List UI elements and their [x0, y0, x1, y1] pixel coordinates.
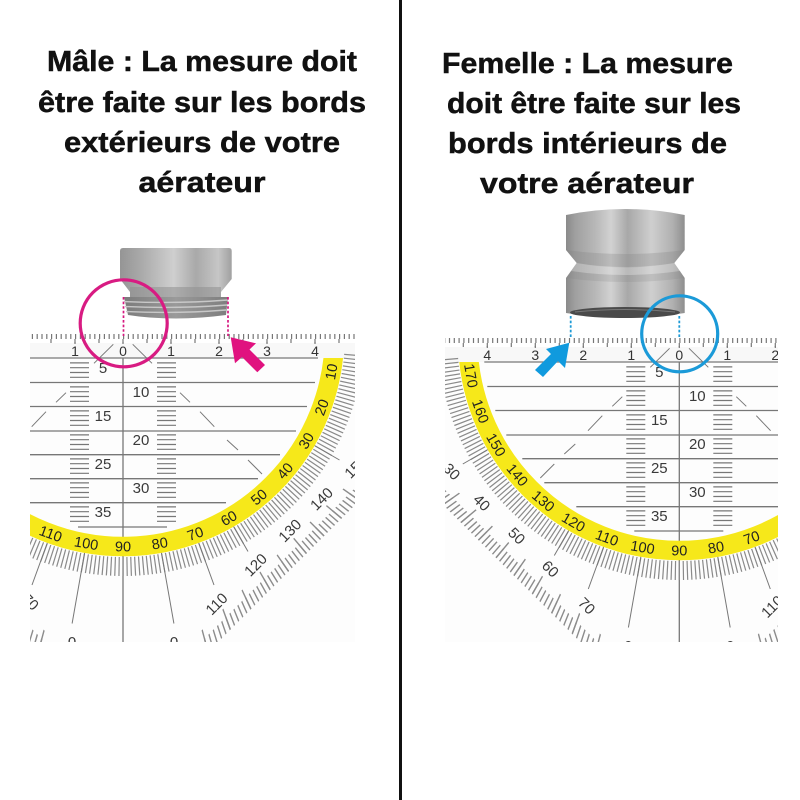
- protractor ruler: female: 2: [579, 347, 587, 363]
- measure guides: male: [124, 297, 228, 336]
- protractor ruler: male: 120: [241, 550, 271, 580]
- protractor ruler: female: 0: [675, 347, 683, 363]
- protractor ruler: female: 15: [651, 412, 668, 429]
- heading: male: aérateur: [138, 167, 266, 199]
- yellow degree scale: female: 170: [460, 363, 480, 389]
- yellow degree scale: male: 20: [312, 397, 333, 418]
- divider line: [399, 0, 402, 800]
- heading: male: [38, 46, 366, 199]
- protractor ruler: female: 5: [655, 364, 663, 381]
- yellow degree scale: female: 150: [482, 431, 508, 460]
- protractor ruler: female: [445, 338, 778, 642]
- protractor ruler: female: 0: [624, 638, 632, 655]
- yellow degree scale: female: 130: [528, 488, 557, 516]
- protractor ruler: female: 20: [689, 436, 706, 453]
- protractor ruler: male: 5: [99, 360, 107, 377]
- measure guides: female: [571, 316, 679, 339]
- protractor ruler: male: 35: [95, 504, 111, 521]
- protractor ruler: female: 50: [504, 524, 528, 548]
- protractor ruler: female: 40: [469, 491, 493, 515]
- yellow degree scale: female: 80: [707, 539, 726, 558]
- protractor ruler: male: 3: [263, 343, 271, 359]
- aerator: male thread: [120, 248, 232, 318]
- protractor ruler: male: 1: [71, 343, 79, 359]
- protractor ruler: male: 1: [167, 343, 175, 359]
- yellow degree scale: male: 80: [151, 535, 169, 554]
- yellow degree scale: female: 110: [593, 527, 620, 550]
- protractor ruler: male: 2: [215, 343, 223, 359]
- protractor ruler: male: 140: [307, 484, 337, 514]
- yellow degree scale: male: 100: [73, 534, 99, 554]
- heading: female: bords intérieurs de: [448, 128, 727, 160]
- protractor ruler: male: 150: [341, 452, 371, 482]
- yellow degree scale: male: 40: [274, 460, 297, 483]
- yellow degree scale: male: [30, 358, 344, 556]
- protractor ruler: male: 10: [133, 384, 149, 401]
- protractor ruler: female: 35: [651, 508, 668, 525]
- yellow degree scale: male: 90: [115, 540, 131, 556]
- heading: female: Femelle : La mesure: [442, 48, 733, 80]
- protractor ruler: male: 4: [311, 343, 319, 359]
- yellow degree scale: female: 160: [468, 398, 491, 426]
- protractor ruler: male: 30: [133, 480, 149, 497]
- protractor ruler: female: 1: [723, 347, 731, 363]
- yellow degree scale: male: 60: [218, 508, 240, 530]
- protractor ruler: female: 4: [483, 347, 491, 363]
- heading: male: être faite sur les bords: [38, 87, 366, 119]
- arrow: female: [535, 343, 569, 377]
- protractor ruler: female: 70: [574, 594, 598, 618]
- yellow degree scale: male: 110: [37, 523, 64, 546]
- circle highlight: male: [80, 280, 167, 367]
- yellow degree scale: female: 100: [629, 538, 656, 558]
- yellow degree scale: female: 120: [559, 510, 587, 536]
- yellow degree scale: female: [459, 362, 778, 560]
- yellow degree scale: male: 10: [323, 363, 342, 381]
- protractor ruler: male: 0: [68, 634, 76, 651]
- protractor ruler: male: 130: [275, 516, 305, 546]
- circle highlight: female: [642, 296, 718, 372]
- protractor ruler: male: 25: [95, 456, 111, 473]
- protractor ruler: female: 0: [726, 638, 734, 655]
- panel: female: [444, 52, 778, 642]
- yellow degree scale: female: 140: [503, 461, 530, 490]
- protractor ruler: female: 30: [439, 460, 463, 484]
- heading: male: extérieurs de votre: [64, 127, 340, 159]
- protractor ruler: female: 3: [531, 347, 539, 363]
- protractor ruler: female: 10: [689, 388, 706, 405]
- yellow degree scale: male: 30: [296, 430, 318, 452]
- protractor ruler: male: 0: [119, 343, 127, 359]
- protractor ruler: male: 110: [203, 590, 232, 619]
- protractor ruler: male: 0: [170, 634, 178, 651]
- protractor ruler: female: 25: [651, 460, 668, 477]
- protractor ruler: male: [30, 334, 355, 642]
- protractor ruler: male: 20: [133, 432, 149, 449]
- protractor ruler: female: 2: [771, 347, 779, 363]
- heading: female: [442, 48, 741, 200]
- arrow: male: [231, 337, 265, 372]
- protractor ruler: male: 70: [18, 590, 42, 614]
- yellow degree scale: male: 50: [248, 486, 271, 509]
- protractor ruler: male: 15: [95, 408, 111, 425]
- protractor ruler: female: 1: [627, 347, 635, 363]
- yellow degree scale: female: 90: [671, 544, 687, 560]
- protractor ruler: female: 60: [538, 557, 562, 581]
- yellow degree scale: male: 70: [185, 524, 206, 545]
- panel: male: [30, 49, 365, 642]
- protractor ruler: female: 110: [758, 593, 787, 622]
- yellow degree scale: female: 70: [742, 528, 762, 549]
- heading: male: Mâle : La mesure doit: [47, 46, 357, 78]
- protractor ruler: female: 30: [689, 484, 706, 501]
- heading: female: votre aérateur: [480, 168, 694, 200]
- aerator: female thread: [566, 209, 685, 318]
- heading: female: doit être faite sur les: [447, 88, 741, 120]
